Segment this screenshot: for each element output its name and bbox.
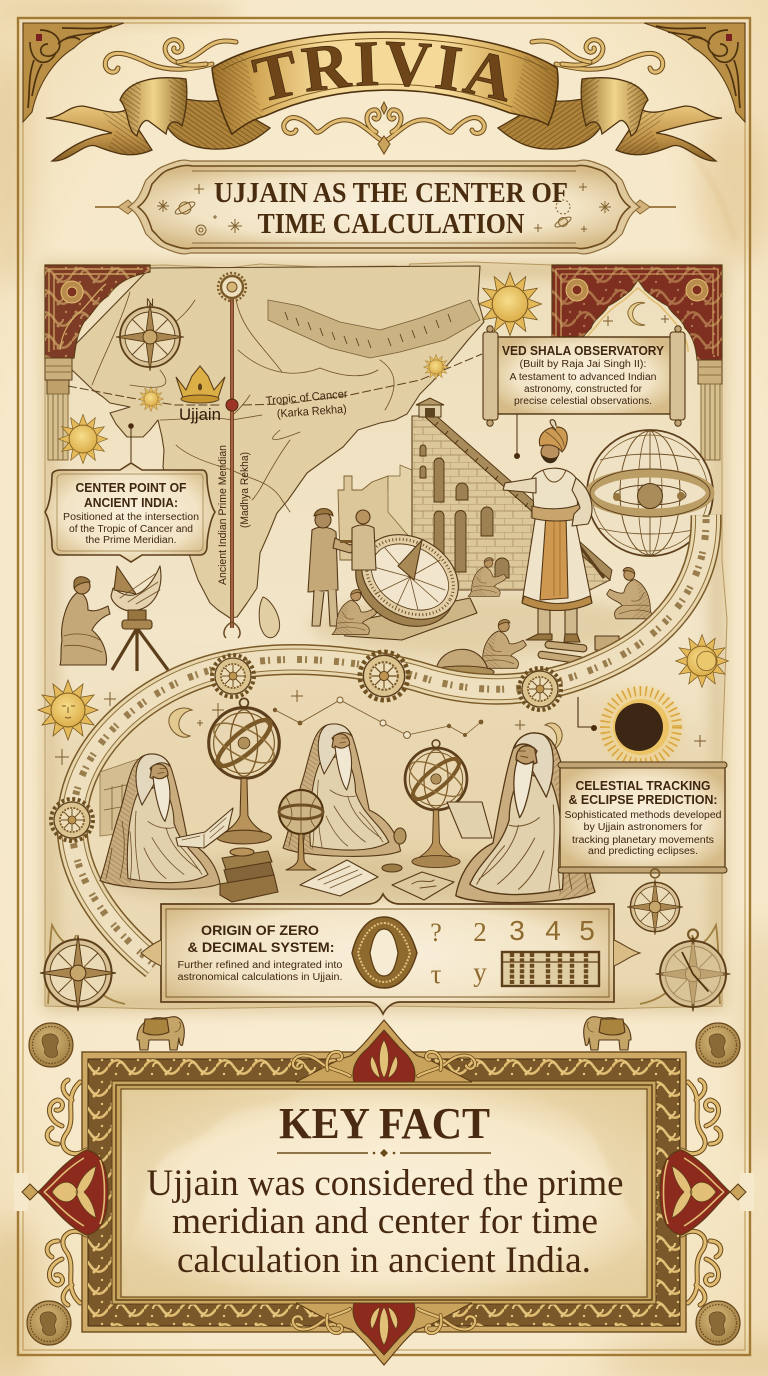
medallions on the band [51, 652, 561, 841]
label: meridian: (Madhya Rekha) [239, 452, 251, 528]
callout: celestial tracking and eclipse prediction: Sophisticated methods developed [564, 810, 722, 821]
icon: small sun on the tropic [138, 386, 164, 412]
right corner arch [552, 265, 722, 360]
decorative elephants [137, 1017, 631, 1050]
books and papers [220, 828, 454, 902]
icon: sun right [676, 635, 728, 687]
small globe on stand [279, 790, 323, 870]
stone dome and logs [430, 636, 619, 678]
small worker with block [468, 558, 506, 596]
text: & DECIMAL SYSTEM: [188, 939, 334, 955]
sage seated right [456, 733, 595, 903]
frame band [82, 1052, 686, 1332]
key fact text [146, 1163, 624, 1281]
callout: center point of ancient India [45, 463, 215, 562]
sundial [340, 518, 477, 644]
left ribbon [46, 78, 270, 161]
icon: sun left [58, 414, 108, 464]
Himalayas shading [268, 300, 480, 358]
callout: center point of ancient India: ANCIENT INDIA: [84, 496, 178, 510]
icon: sun face [38, 680, 98, 740]
numerals: τ [431, 959, 442, 989]
callout: center point of ancient India: CENTER POINT OF [76, 481, 187, 495]
label: meridian: Ancient Indian Prime Meridian [217, 445, 229, 585]
panel: illustrated map and scenes [38, 262, 730, 1014]
icon: pocket watch bottom right [656, 929, 730, 1011]
ornate zero [352, 917, 417, 988]
callout: celestial tracking and eclipse prediction: by Ujjain astronomers for [584, 822, 703, 833]
callout: Ved Shala Observatory scroll: A testament to advanced Indian [510, 372, 656, 383]
label: Tropic of Cancer: Tropic of Cancer [265, 388, 348, 408]
armillary sphere large [587, 430, 713, 556]
left column [45, 358, 72, 460]
right side crest [660, 1080, 754, 1305]
numerals: 5 [579, 915, 595, 946]
rivers and state lines [92, 292, 394, 512]
scene: Ved Shala observatory [308, 398, 713, 678]
corner ornament: top right [644, 23, 745, 122]
callout: celestial tracking and eclipse prediction: and predicting eclipses. [588, 846, 698, 857]
subtitle text: UJJAIN AS THE CENTER OF [214, 177, 568, 209]
zodiac band [72, 515, 706, 965]
numerals: 2 [473, 917, 487, 947]
icon: small sun east [423, 354, 449, 380]
Sri Lanka [259, 597, 280, 638]
icon: eclipse [601, 687, 681, 767]
subtitle text [214, 177, 568, 240]
callout: center point of ancient India: the Prime Meridian. [86, 535, 176, 546]
ribbon flourishes above [105, 40, 663, 72]
sage scene floor shadow [100, 854, 600, 906]
figure: astronomer with instrument on stool [60, 566, 168, 671]
callout: celestial tracking and eclipse prediction: & ECLIPSE PREDICTION: [568, 793, 718, 807]
title banner [46, 31, 722, 202]
panel: key fact frame [14, 1020, 754, 1365]
icon: compass bottom left [40, 935, 116, 1011]
clipboard [447, 802, 492, 838]
numerals [430, 915, 595, 989]
parchment interior [121, 1089, 647, 1297]
right ribbon [498, 78, 722, 161]
ornamental divider [277, 1149, 491, 1157]
map of India [70, 266, 484, 638]
icon: crown [176, 366, 225, 403]
label: meridian [217, 445, 251, 585]
key fact text: Ujjain was considered the prime [146, 1163, 624, 1204]
kneeling workers [332, 590, 377, 635]
pointer: eclipse [578, 697, 597, 731]
callout: Ved Shala Observatory scroll: VED SHALA OBSERVATORY [502, 344, 665, 358]
decorative coins [27, 1023, 740, 1345]
bottom crest [293, 1303, 475, 1365]
tropic of cancer line [68, 354, 482, 405]
text: ORIGIN OF ZERO [201, 922, 319, 938]
text: astronomical calculations in Ujjain. [178, 972, 342, 983]
callout: celestial tracking and eclipse prediction: CELESTIAL TRACKING [576, 779, 710, 793]
abacus [502, 952, 599, 986]
icon: pocket compass right [627, 869, 683, 935]
callout: origin of zero and decimal system [141, 894, 640, 1014]
ruins [338, 476, 412, 560]
callout: center point of ancient India: Positioned at the intersection [63, 512, 199, 523]
armillary instruments [208, 698, 467, 868]
callout: Ved Shala Observatory scroll [483, 326, 685, 426]
flourish under banner [284, 102, 484, 154]
numerals: 4 [545, 915, 561, 946]
subtitle text: TIME CALCULATION [258, 208, 525, 240]
Raja Jai Singh figure [503, 420, 604, 642]
crescent moon [628, 302, 645, 325]
key fact heading: KEY FACT [279, 1099, 490, 1148]
panel corner scrolls bottom [48, 925, 720, 1004]
label: Ujjain: Ujjain [179, 405, 221, 424]
key fact text: meridian and center for time [172, 1201, 598, 1242]
callout: celestial tracking and eclipse prediction: tracking planetary movements [572, 835, 714, 846]
left side crest [14, 1080, 108, 1305]
sage seated center [283, 724, 401, 856]
pointer: center point [128, 423, 134, 462]
pointer: Ved Shala [514, 414, 520, 459]
library shelves [100, 755, 150, 836]
subtitle plaque [95, 160, 676, 254]
title text: TRIVIA [250, 41, 508, 102]
text: Further refined and integrated into [178, 960, 343, 971]
compass rose [116, 297, 184, 371]
icon: large sun north east [478, 272, 542, 336]
callout: Ved Shala Observatory scroll: astronomy, constructed for [524, 384, 643, 395]
callout: Ved Shala Observatory scroll: precise celestial observations. [514, 396, 652, 407]
staircase building [412, 398, 612, 590]
small planets and stars [157, 183, 611, 235]
label: Tropic of Cancer [265, 388, 348, 420]
marker: Ujjain intersection [226, 399, 238, 411]
second standing worker [352, 510, 376, 570]
label: Tropic of Cancer: (Karka Rekha) [276, 404, 347, 420]
compass rose: N [146, 297, 154, 309]
callout: celestial tracking and eclipse prediction [558, 762, 727, 873]
key fact text: calculation in ancient India. [177, 1240, 591, 1281]
prime meridian [218, 273, 246, 638]
panel paper [45, 262, 727, 1009]
numerals: 3 [509, 915, 525, 946]
ground [310, 593, 650, 657]
open book [176, 808, 233, 848]
central ribbon band [212, 32, 558, 134]
stars and constellations [55, 690, 706, 765]
sage seated left [100, 754, 220, 889]
left corner arch [45, 265, 150, 358]
corner ornament: top left [23, 23, 124, 122]
right column [698, 360, 722, 460]
text [178, 922, 343, 983]
callout: center point of ancient India: of the Tropic of Cancer and [69, 524, 193, 535]
numerals: ? [430, 918, 442, 947]
callout: Ved Shala Observatory scroll: (Built by Raja Jai Singh II): [520, 359, 646, 370]
numerals: y [473, 957, 487, 987]
top crest [293, 1020, 475, 1082]
standing worker [308, 508, 364, 626]
